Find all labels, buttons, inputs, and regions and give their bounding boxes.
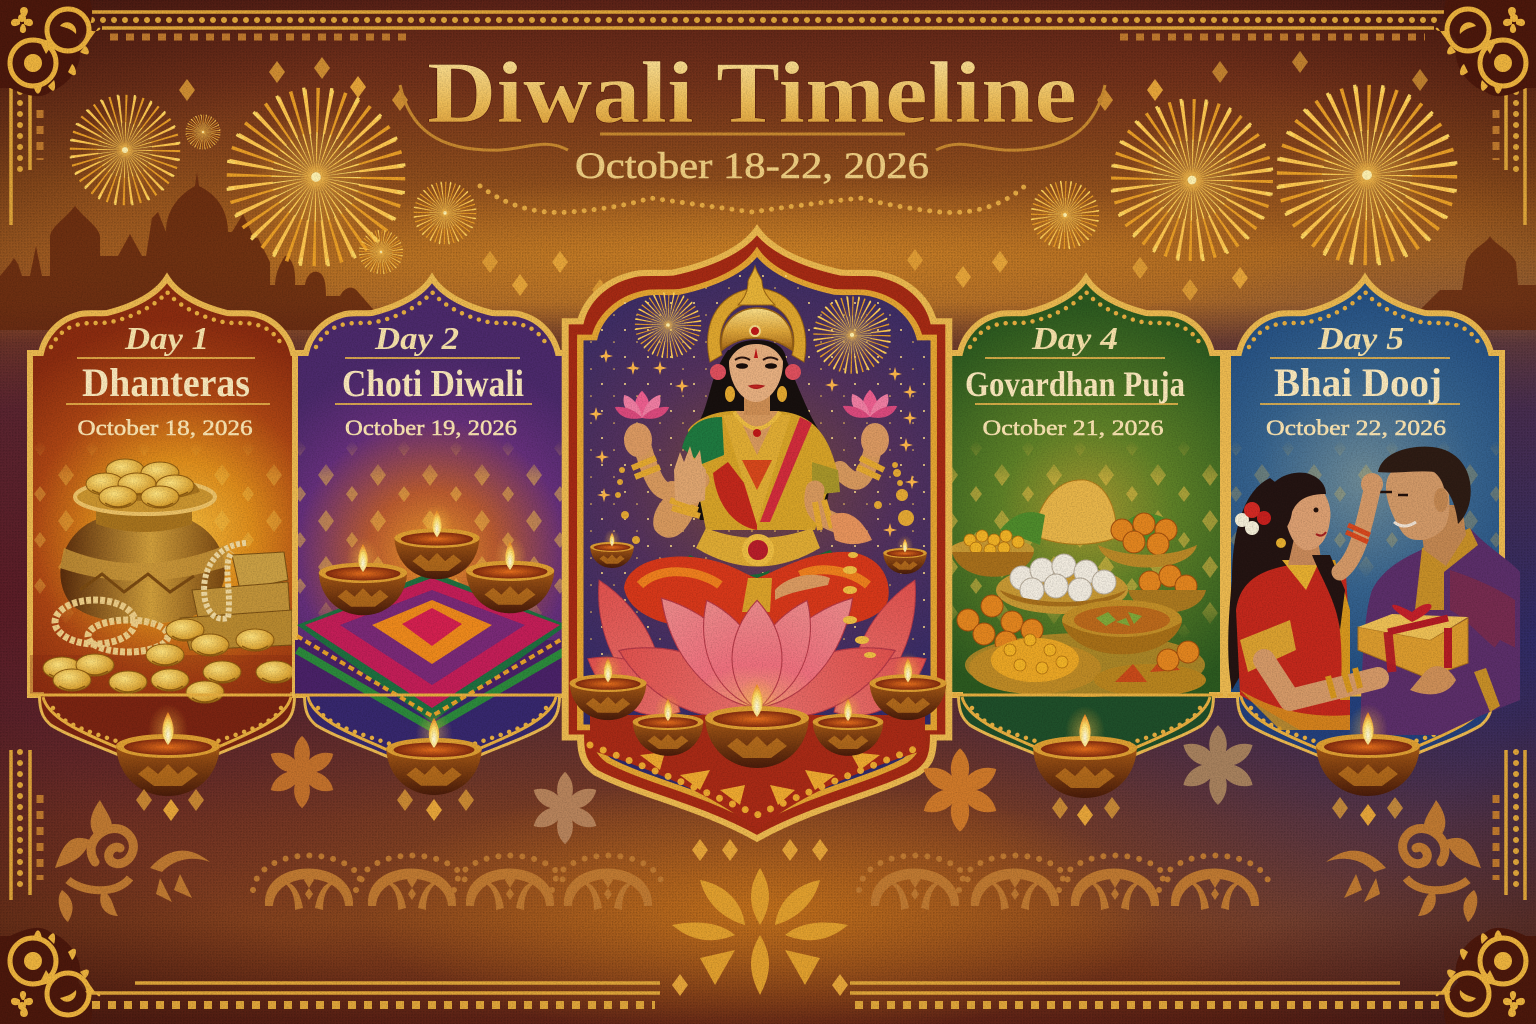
icon: diya inner right xyxy=(813,693,883,756)
firework 5 xyxy=(360,231,402,273)
eye right xyxy=(765,363,777,369)
facial details xyxy=(735,358,778,360)
panel: day 2 Choti Diwali xyxy=(295,278,569,795)
day label: Day 5 xyxy=(1317,320,1404,356)
food: laddoo plate xyxy=(957,595,1043,653)
title: Diwali Timeline xyxy=(427,45,1077,142)
green sash xyxy=(680,550,835,583)
scattered diamonds xyxy=(179,51,1428,301)
corner ornament bottom left xyxy=(0,928,100,1024)
firework 4 xyxy=(415,183,475,243)
seated legs xyxy=(624,552,889,629)
icon: diya top xyxy=(394,504,480,579)
food: plate right xyxy=(1098,513,1197,568)
saree band xyxy=(760,417,812,522)
food: white laddoos xyxy=(996,554,1128,614)
icon: diya right xyxy=(466,535,554,613)
date: October 22, 2026 xyxy=(1266,415,1446,440)
firework 3 xyxy=(230,91,402,263)
eyes xyxy=(736,363,748,369)
necklace inner red xyxy=(742,460,772,490)
arm: right lower xyxy=(814,490,850,527)
icon: gold bars xyxy=(180,552,292,650)
arm: left upper xyxy=(642,445,672,491)
icon: bangles xyxy=(55,600,168,652)
figure: Lakshmi xyxy=(615,266,897,629)
band line xyxy=(1228,695,1502,752)
figure: brother xyxy=(1360,447,1520,735)
foot xyxy=(775,575,830,600)
date: October 18, 2026 xyxy=(78,415,252,440)
falling coins xyxy=(615,462,914,544)
icon: necklace xyxy=(204,543,246,619)
hair parting xyxy=(725,340,787,370)
corner ornament bottom right xyxy=(1436,928,1536,1024)
firework right xyxy=(815,298,889,372)
icon: diya far left xyxy=(570,652,646,720)
chest xyxy=(736,411,778,455)
firework 7 xyxy=(1114,102,1270,258)
border dots xyxy=(51,292,283,744)
hand left upper xyxy=(624,423,652,457)
band line xyxy=(295,695,569,752)
open hand xyxy=(830,513,872,544)
band line xyxy=(30,695,304,752)
earrings xyxy=(725,386,787,402)
divider xyxy=(1260,358,1460,404)
food: yellow bowl xyxy=(1128,565,1206,612)
bindi xyxy=(754,348,758,358)
firework 2 xyxy=(186,115,220,149)
border dots xyxy=(970,292,1202,744)
food: leaves xyxy=(1000,512,1165,545)
icon: diya xyxy=(1316,704,1420,796)
bottom centre motif xyxy=(672,839,848,996)
rangoli floor xyxy=(590,715,925,830)
subtitle date: October 18-22, 2026 xyxy=(575,146,929,187)
hand right upper xyxy=(861,423,889,457)
face xyxy=(729,342,783,402)
lotus right xyxy=(843,390,897,418)
saree red xyxy=(713,462,757,530)
band line xyxy=(949,695,1223,752)
icon: small diya left xyxy=(590,529,634,568)
firework 8 xyxy=(1280,88,1454,262)
icon: diya xyxy=(1033,706,1137,798)
pink flowers xyxy=(710,364,801,380)
corner ornament top left xyxy=(0,0,100,96)
icon: diya centre xyxy=(705,676,809,768)
panel: day 4 Govardhan Puja xyxy=(949,278,1223,798)
crown halo xyxy=(708,288,806,362)
lips xyxy=(749,385,764,388)
hair xyxy=(687,350,830,520)
food: boondi plate xyxy=(969,634,1101,694)
icon: diya far right xyxy=(870,652,946,720)
food: tray xyxy=(965,633,1205,697)
rangoli xyxy=(295,572,569,728)
necklace short xyxy=(734,412,780,428)
arm: left lower xyxy=(663,480,700,528)
day label: Day 1 xyxy=(124,320,209,356)
torso xyxy=(688,411,838,530)
title flourish xyxy=(400,85,1105,150)
day label: Day 4 xyxy=(1031,320,1118,356)
corner ornament top right xyxy=(1436,0,1536,96)
central pleat xyxy=(742,578,772,612)
food: sweets mound xyxy=(1032,480,1116,544)
border dots xyxy=(1249,292,1481,744)
date: October 21, 2026 xyxy=(982,415,1164,440)
firework left xyxy=(636,293,700,357)
city skyline left xyxy=(0,172,400,330)
icon: gold pot xyxy=(60,459,232,624)
gold coins on lap xyxy=(843,552,858,594)
divider xyxy=(66,358,270,404)
bangle right upper xyxy=(857,458,884,478)
food: curry bowl xyxy=(1062,600,1182,654)
date: October 19, 2026 xyxy=(345,415,517,440)
blouse xyxy=(682,417,724,464)
icon: gift box xyxy=(1358,604,1468,678)
big lotus xyxy=(577,571,937,736)
panel: day 5 Bhai Dooj xyxy=(1225,278,1520,796)
icon: diya bottom xyxy=(386,710,482,795)
palm xyxy=(674,446,706,505)
figure: sister xyxy=(1228,473,1383,730)
panel: day 1 Dhanteras xyxy=(30,278,304,796)
lotus left xyxy=(615,391,669,419)
divider xyxy=(335,358,532,404)
city skyline right xyxy=(1400,236,1536,330)
belt buckle xyxy=(745,537,771,563)
icon: small diya right xyxy=(883,535,927,574)
bangle left upper xyxy=(632,458,660,477)
icon: coin pile xyxy=(43,619,294,703)
panel: centre Lakshmi xyxy=(565,230,949,839)
crown top xyxy=(738,266,775,305)
blouse right xyxy=(812,462,840,495)
festival name: Bhai Dooj xyxy=(1274,360,1442,405)
festival name: Choti Diwali xyxy=(342,363,524,405)
day label: Day 2 xyxy=(374,320,459,356)
border dots xyxy=(316,292,548,744)
bottom ornament band xyxy=(55,725,1481,922)
small gold coins on lotus xyxy=(843,616,876,658)
firework 6 xyxy=(1032,182,1098,248)
leg highlights xyxy=(640,570,868,585)
food: plate left xyxy=(950,530,1034,577)
neck xyxy=(744,395,770,415)
icon: diya inner left xyxy=(633,693,703,756)
festival name: Dhanteras xyxy=(82,360,250,405)
divider xyxy=(975,358,1178,404)
arm: right upper xyxy=(840,445,874,481)
hand on gift xyxy=(1410,666,1456,694)
crown xyxy=(721,308,793,350)
sparkles xyxy=(589,349,919,537)
necklace mass xyxy=(723,415,791,525)
garland xyxy=(480,186,1025,212)
icon: diya xyxy=(116,704,220,796)
firework 1 xyxy=(72,97,178,203)
festival name: Govardhan Puja xyxy=(965,364,1185,404)
icon: diya left xyxy=(319,537,407,615)
belt xyxy=(696,528,820,566)
bangle lower xyxy=(670,500,832,530)
pendant xyxy=(753,429,761,437)
food: tray right xyxy=(1094,641,1206,696)
